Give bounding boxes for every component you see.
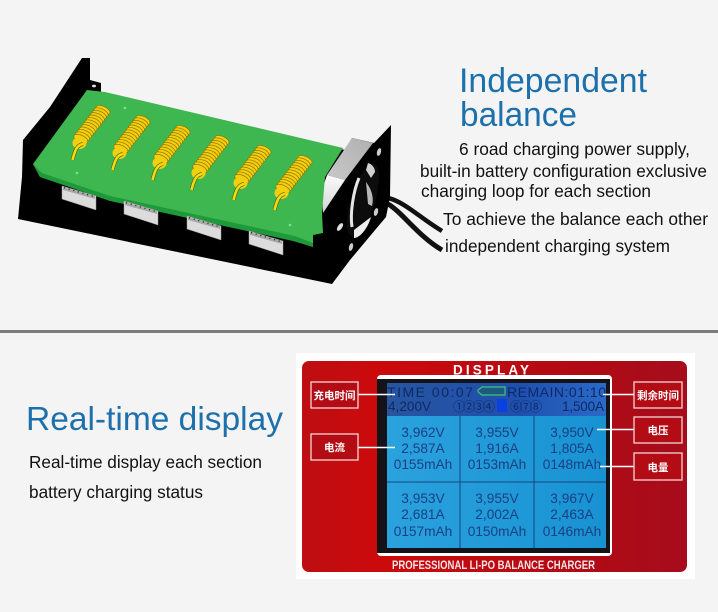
cell readings — [394, 425, 601, 539]
text block: real-time description: battery charging status — [29, 482, 203, 502]
illustration: balance board module — [18, 58, 442, 284]
fan housing — [322, 138, 373, 213]
label: capacity — [634, 453, 682, 480]
cell grid — [387, 416, 606, 548]
status bar: REMAIN:01:10 — [507, 384, 606, 400]
cell readings: 2,587A — [401, 441, 446, 456]
cell readings: 0157mAh — [394, 524, 452, 539]
black chassis — [18, 58, 391, 284]
label: capacity: 电量 — [648, 461, 669, 474]
cell readings: 2,002A — [475, 507, 520, 522]
cell readings: 3,955V — [475, 425, 520, 440]
text block: independent balance description: independent charging system — [445, 236, 670, 256]
label: charging time: 充电时间 — [314, 389, 356, 402]
fan — [336, 148, 386, 251]
footer brand text: PROFESSIONAL LI-PO BALANCE CHARGER — [392, 560, 596, 572]
label: current: 电流 — [324, 441, 345, 454]
cell readings: 2,681A — [401, 507, 446, 522]
board front edge — [33, 164, 313, 247]
red faceplate — [302, 361, 687, 572]
screen bezel — [377, 375, 612, 556]
section divider — [0, 330, 718, 333]
heading: Independent balance: Independent — [459, 62, 648, 100]
text block: independent balance description: 6 road charging power supply, — [459, 139, 690, 159]
solder points — [76, 107, 291, 226]
cell readings: 0150mAh — [468, 524, 526, 539]
status bar: TIME 00:07 — [387, 384, 473, 400]
display title: DISPLAY — [453, 362, 529, 378]
label: voltage — [634, 417, 682, 443]
label: charging time — [311, 382, 358, 408]
balance connectors — [62, 186, 283, 255]
cell readings: 1,916A — [475, 441, 520, 456]
cell readings: 0155mAh — [394, 457, 452, 472]
leader lines — [358, 394, 634, 466]
cell readings: 3,962V — [401, 425, 446, 440]
heading: Real-time display: Real-time display — [26, 401, 283, 438]
text block: independent balance description: To achieve the balance each other — [443, 209, 708, 229]
status bar: 1,500A — [562, 399, 604, 414]
white backing — [296, 353, 695, 579]
cell readings: 3,967V — [550, 491, 595, 506]
label: current — [311, 434, 358, 460]
status bar: ①②③④ — [453, 400, 495, 414]
screen inner — [377, 379, 610, 553]
panel: charger display — [296, 353, 695, 579]
battery icon — [478, 387, 505, 395]
cell readings: 1,805A — [550, 441, 595, 456]
cell readings: 0153mAh — [468, 457, 526, 472]
text block: independent balance description — [420, 139, 708, 256]
text block: independent balance description: built-in battery configuration exclusive — [420, 161, 707, 181]
status bar — [387, 383, 606, 416]
cell readings: 0148mAh — [543, 457, 601, 472]
label: remaining time — [634, 382, 682, 408]
label: voltage: 电压 — [648, 424, 669, 437]
cell readings: 0146mAh — [543, 524, 601, 539]
cell readings: 3,953V — [401, 491, 446, 506]
label: remaining time: 剩余时间 — [637, 389, 679, 402]
cell readings: 3,955V — [475, 491, 520, 506]
heading: Independent balance: balance — [460, 96, 577, 134]
status bar: 4,200V — [388, 399, 431, 414]
wires — [388, 198, 442, 250]
text block: real-time description: Real-time display each section — [29, 452, 262, 472]
yellow coils — [72, 104, 313, 210]
text block: independent balance description: charging loop for each section — [421, 181, 651, 201]
green circuit board — [33, 90, 343, 247]
status bar: ⑥⑦⑧ — [510, 400, 542, 414]
text block: real-time description — [29, 452, 262, 502]
cell readings: 3,950V — [550, 425, 595, 440]
bracket hole — [92, 85, 96, 87]
heading: Independent balance — [459, 62, 648, 134]
cell readings: 2,463A — [550, 507, 595, 522]
